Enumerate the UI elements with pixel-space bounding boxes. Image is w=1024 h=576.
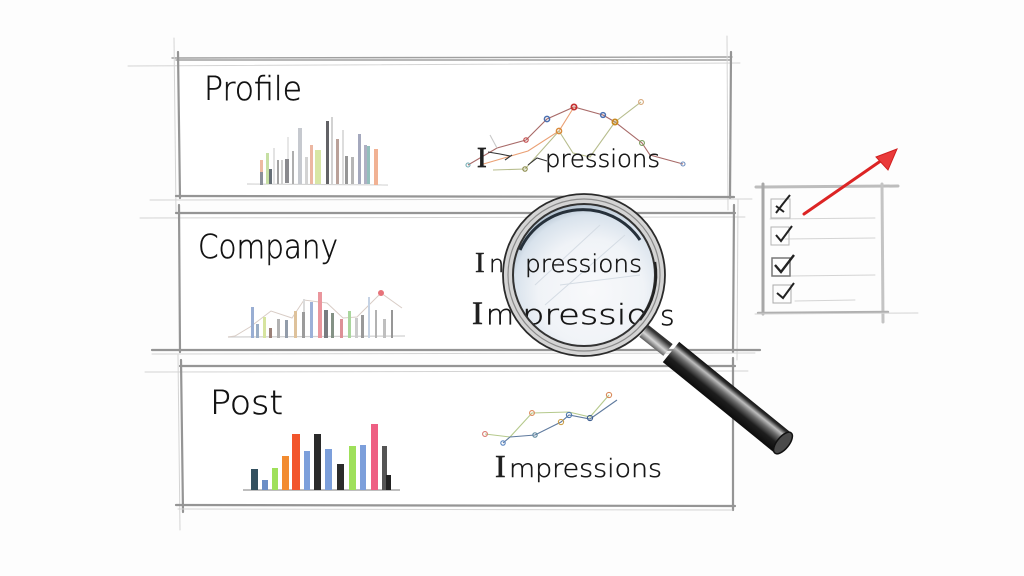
line chart: profile xyxy=(466,100,685,171)
lens xyxy=(513,204,655,346)
chart: company bars with trend line xyxy=(228,290,405,338)
ring xyxy=(503,194,665,356)
heading: Post: Post xyxy=(210,383,283,422)
magnified text: pressio xyxy=(522,298,648,331)
heading: Profile: Profile xyxy=(204,69,302,108)
checkbox rows xyxy=(771,195,794,303)
label: Impressions (company, second row, left of lens) xyxy=(472,296,514,332)
handle xyxy=(644,331,796,457)
bar chart: profile xyxy=(247,117,388,185)
bar chart: post xyxy=(243,424,400,490)
lens hatching xyxy=(535,225,640,305)
panel outline: company xyxy=(140,200,760,360)
label: Impressions (profile): pressions xyxy=(545,145,660,173)
magnified text xyxy=(522,250,648,331)
panel outline: profile xyxy=(128,36,752,212)
label: trailing letter outside lens: s xyxy=(660,299,675,332)
panel: company xyxy=(140,200,760,360)
label: Impressions (post): I xyxy=(495,448,506,484)
label: Impressions (company, left of lens): n xyxy=(489,250,504,278)
label: Impressions (company, left of lens): I xyxy=(475,247,485,279)
label: Impressions (company, second row, left of lens): m xyxy=(486,298,514,331)
panel: checklist xyxy=(755,149,918,322)
line chart: post xyxy=(483,392,617,445)
label: Impressions (profile): I xyxy=(477,142,487,174)
label: Impressions (post) xyxy=(495,448,662,484)
panel outline: post xyxy=(145,355,748,530)
icon: magnifying glass xyxy=(503,194,796,457)
label: Impressions (profile) xyxy=(477,142,660,174)
label: Impressions (company, second row, left of lens): I xyxy=(472,296,483,332)
checklist outline xyxy=(755,184,918,322)
panel: post xyxy=(145,355,748,530)
heading: Company: Company xyxy=(198,227,338,266)
label: Impressions (post): mpressions xyxy=(509,454,662,483)
label: Impressions (company, left of lens) xyxy=(475,247,504,279)
panel: profile xyxy=(128,36,752,212)
magnified text: pressions xyxy=(525,250,642,278)
arrow: red upward trend xyxy=(804,149,897,214)
